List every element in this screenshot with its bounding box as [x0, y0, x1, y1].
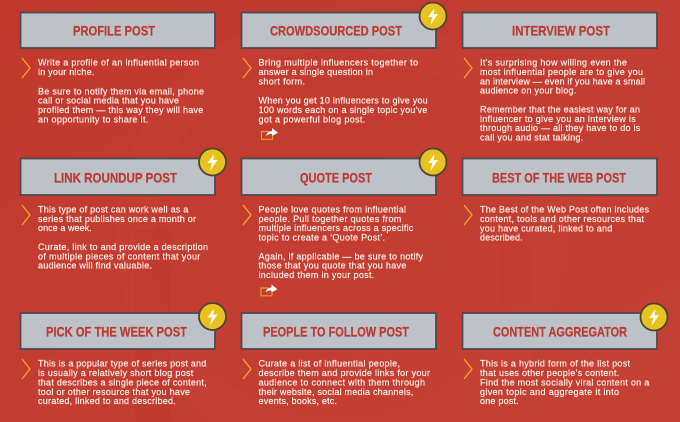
- heading: people to follow post: PEOPLE TO FOLLOW POST: [263, 324, 409, 340]
- panel: interview post: [462, 12, 657, 142]
- icon: share: [262, 128, 278, 139]
- text: interview post: [480, 58, 645, 142]
- text: crowdsourced post: short form.: [258, 76, 305, 86]
- heading: crowdsourced post: CROWDSOURCED POST: [270, 22, 402, 38]
- text: content aggregator: This is a hybrid form of the list post: [480, 359, 630, 369]
- icon: chevron: [22, 58, 30, 78]
- text: profile post: profiled them — this way they will have: [38, 105, 203, 115]
- icon: lightning badge: [199, 148, 226, 176]
- icon: chevron: [243, 205, 251, 225]
- icon: chevron: [243, 359, 251, 379]
- text: link roundup post: series that publishes once a month or: [38, 214, 196, 224]
- panel: best of the web post: [462, 158, 657, 243]
- text: best of the web post: content, tools and other resources that: [480, 214, 644, 224]
- panel: content aggregator: [462, 304, 668, 406]
- panel: profile post: [20, 12, 215, 124]
- text: link roundup post: Curate, link to and provide a description: [38, 242, 208, 252]
- text: crowdsourced post: 100 words each on a single topic you've: [258, 105, 427, 115]
- icon: lightning badge: [640, 304, 668, 330]
- text: profile post: Write a profile of an influential person: [38, 58, 199, 68]
- text: crowdsourced post: Bring multiple influencers together to: [258, 58, 418, 68]
- panel: people to follow post: [242, 313, 436, 406]
- text: quote post: Again, if applicable — be sure to notify: [258, 251, 424, 261]
- panel: link roundup post: [20, 148, 226, 271]
- heading: profile post: [20, 12, 215, 48]
- text: pick of the week post: [38, 359, 207, 406]
- text: people to follow post: audience to connect with them through: [258, 377, 425, 387]
- heading: best of the web post: BEST OF THE WEB POST: [492, 170, 626, 186]
- text: pick of the week post: is usually a relatively short blog post: [38, 368, 194, 378]
- text: pick of the week post: tool or other resource that you have: [38, 387, 190, 397]
- icon: lightning badge: [199, 303, 226, 330]
- heading: content aggregator: [462, 313, 657, 349]
- text: interview post: an interview — even if you have a small: [480, 76, 645, 86]
- text: profile post: Be sure to notify them via email, phone: [38, 86, 204, 96]
- text: link roundup post: audience will find valuable.: [38, 261, 152, 271]
- panel: pick of the week post: [20, 303, 226, 406]
- text: content aggregator: that uses other people's content.: [480, 368, 619, 378]
- heading: best of the web post: [462, 158, 657, 195]
- text: best of the web post: [480, 205, 650, 243]
- text: quote post: included them in your post.: [258, 270, 374, 280]
- text: quote post: People love quotes from influential: [258, 204, 406, 214]
- text: quote post: [258, 204, 424, 280]
- heading: link roundup post: [20, 158, 215, 195]
- heading: pick of the week post: [20, 313, 215, 349]
- text: best of the web post: described.: [480, 233, 523, 243]
- text: content aggregator: [480, 359, 649, 406]
- text: pick of the week post: This is a popular type of series post and: [38, 359, 206, 369]
- icon: lightning badge: [420, 148, 446, 176]
- text: quote post: those that you quote that you have: [258, 261, 406, 271]
- icon: lightning badge: [420, 2, 446, 30]
- heading: crowdsourced post: [242, 12, 436, 48]
- text: best of the web post: The Best of the Web Post often includes: [480, 205, 650, 215]
- icon: chevron: [464, 58, 472, 78]
- heading: content aggregator: CONTENT AGGREGATOR: [493, 324, 627, 340]
- icon: chevron: [22, 205, 30, 225]
- text: people to follow post: describe them and provide links for your: [258, 368, 430, 378]
- text: content aggregator: Find the most socially viral content on a: [480, 377, 649, 387]
- text: link roundup post: This type of post can work well as a: [38, 204, 188, 214]
- text: crowdsourced post: got a powerful blog post.: [258, 114, 365, 124]
- heading: pick of the week post: PICK OF THE WEEK POST: [46, 324, 187, 340]
- text: best of the web post: you have curated, linked to and: [480, 223, 612, 233]
- text: interview post: It's surprising how willing even the: [480, 58, 627, 68]
- text: quote post: people. Pull together quotes from: [258, 214, 401, 224]
- text: link roundup post: of multiple pieces of content that your: [38, 251, 200, 261]
- text: people to follow post: Curate a list of influential people,: [258, 359, 400, 369]
- icon: chevron: [464, 359, 472, 379]
- text: crowdsourced post: answer a single question in: [258, 67, 373, 77]
- text: interview post: Remember that the easiest way for an: [480, 104, 640, 114]
- text: quote post: topic to create a ‘Quote Post’.: [258, 233, 385, 243]
- text: crowdsourced post: [258, 58, 428, 124]
- text: interview post: call you and stat talking.: [480, 132, 583, 142]
- heading: interview post: INTERVIEW POST: [512, 22, 610, 38]
- text: profile post: in your niche.: [38, 67, 94, 77]
- heading: profile post: PROFILE POST: [73, 22, 155, 38]
- text: interview post: most influential people are to give you: [480, 67, 643, 77]
- heading: link roundup post: LINK ROUNDUP POST: [54, 170, 177, 186]
- icon: chevron: [464, 205, 472, 225]
- text: pick of the week post: that describes a single piece of content,: [38, 377, 207, 387]
- icon: share: [261, 284, 278, 296]
- text: interview post: audience on your blog.: [480, 86, 576, 96]
- heading: people to follow post: [242, 313, 436, 349]
- text: content aggregator: one post.: [480, 396, 519, 406]
- panel: quote post: [242, 148, 446, 296]
- text: profile post: call or social media that you have: [38, 96, 179, 106]
- text: people to follow post: events, books, etc.: [258, 396, 337, 406]
- icon: chevron: [22, 359, 30, 379]
- panel: crowdsourced post: [242, 2, 446, 139]
- text: interview post: influencer to give you an interview is: [480, 114, 636, 124]
- text: pick of the week post: curated, linked to and described.: [38, 396, 176, 406]
- text: link roundup post: once a week.: [38, 223, 92, 233]
- text: quote post: multiple influencers across a specific: [258, 223, 414, 233]
- text: profile post: an opportunity to share it.: [38, 114, 148, 124]
- icon: chevron: [243, 58, 251, 78]
- text: content aggregator: given topic and aggregate it into: [480, 387, 619, 397]
- text: link roundup post: [38, 204, 208, 271]
- text: profile post: [38, 58, 204, 124]
- text: interview post: through audio — all they have to do is: [480, 123, 641, 133]
- heading: quote post: [242, 158, 436, 195]
- heading: quote post: QUOTE POST: [300, 170, 372, 186]
- text: people to follow post: [258, 359, 430, 406]
- heading: interview post: [462, 12, 657, 48]
- text: crowdsourced post: When you get 10 influencers to give you: [258, 96, 428, 106]
- text: people to follow post: their website, social media channels,: [258, 387, 413, 397]
